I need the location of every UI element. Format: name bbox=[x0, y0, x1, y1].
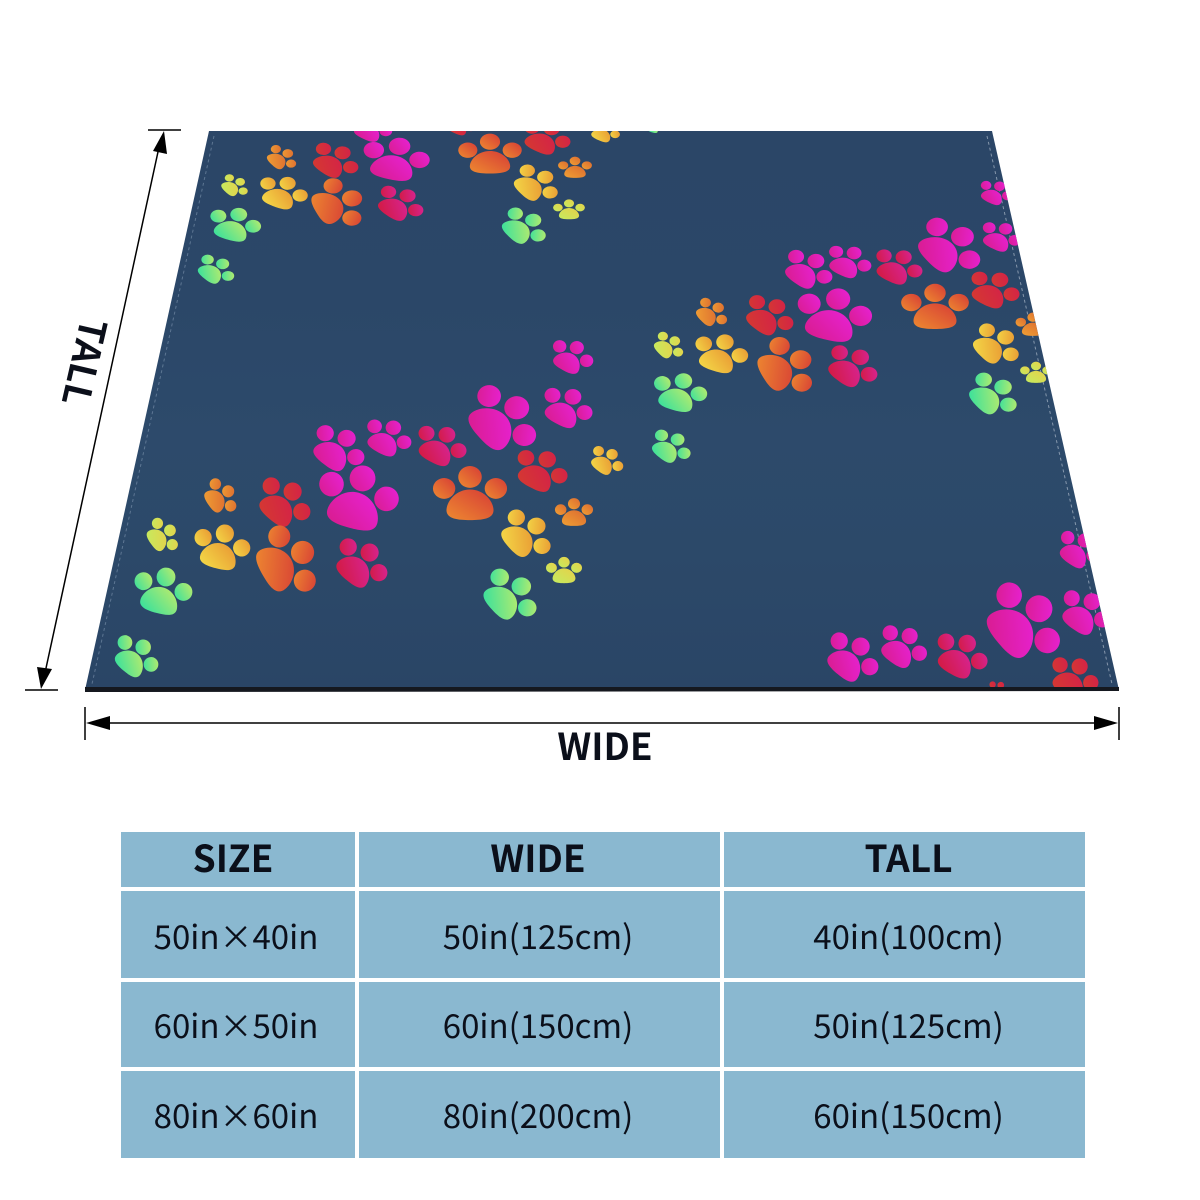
header: tall: TALL bbox=[865, 828, 952, 882]
row 2 size bbox=[121, 982, 355, 1067]
row 3 wide bbox=[359, 1071, 720, 1158]
panel: blanket bbox=[85, 107, 1119, 707]
size table bbox=[121, 828, 1085, 1158]
row 3 wide: 80in(200cm) bbox=[443, 1090, 633, 1138]
row 3 size bbox=[121, 1071, 355, 1158]
header: size: SIZE bbox=[193, 828, 273, 882]
row 1 size bbox=[121, 891, 355, 978]
row 1 wide: 50in(125cm) bbox=[443, 910, 633, 958]
label: tall: TALL bbox=[51, 314, 123, 412]
row 1 tall bbox=[724, 891, 1085, 978]
arrow: tall dimension bbox=[25, 130, 181, 690]
paw cluster: top left bbox=[198, 131, 430, 284]
paw cluster: right bbox=[785, 180, 1048, 414]
paw cluster: lower right bbox=[827, 530, 1105, 687]
paw cluster: top middle bbox=[450, 131, 658, 244]
header: wide bbox=[359, 832, 720, 887]
row 1 wide bbox=[359, 891, 720, 978]
header: tall bbox=[724, 832, 1085, 887]
row 1 tall: 40in(100cm) bbox=[813, 910, 1004, 958]
row 2 wide bbox=[359, 982, 720, 1067]
row 2 tall: 50in(125cm) bbox=[813, 1000, 1004, 1048]
row 2 wide: 60in(150cm) bbox=[443, 1000, 633, 1048]
header: wide: WIDE bbox=[490, 828, 586, 882]
arrow: wide dimension bbox=[85, 707, 1119, 740]
paw cluster: centre bbox=[313, 340, 624, 620]
paw cluster: lower left bbox=[114, 466, 399, 678]
label: wide: WIDE bbox=[557, 717, 653, 771]
row 1 size: 50in×40in bbox=[154, 910, 318, 958]
row 2 size: 60in×50in bbox=[154, 1000, 318, 1048]
row 3 tall bbox=[724, 1071, 1085, 1158]
row 3 tall: 60in(150cm) bbox=[813, 1090, 1004, 1138]
row 3 size: 80in×60in bbox=[154, 1090, 318, 1138]
row 2 tall bbox=[724, 982, 1085, 1067]
header: size bbox=[121, 832, 355, 887]
paw cluster: centre right bbox=[652, 288, 878, 463]
